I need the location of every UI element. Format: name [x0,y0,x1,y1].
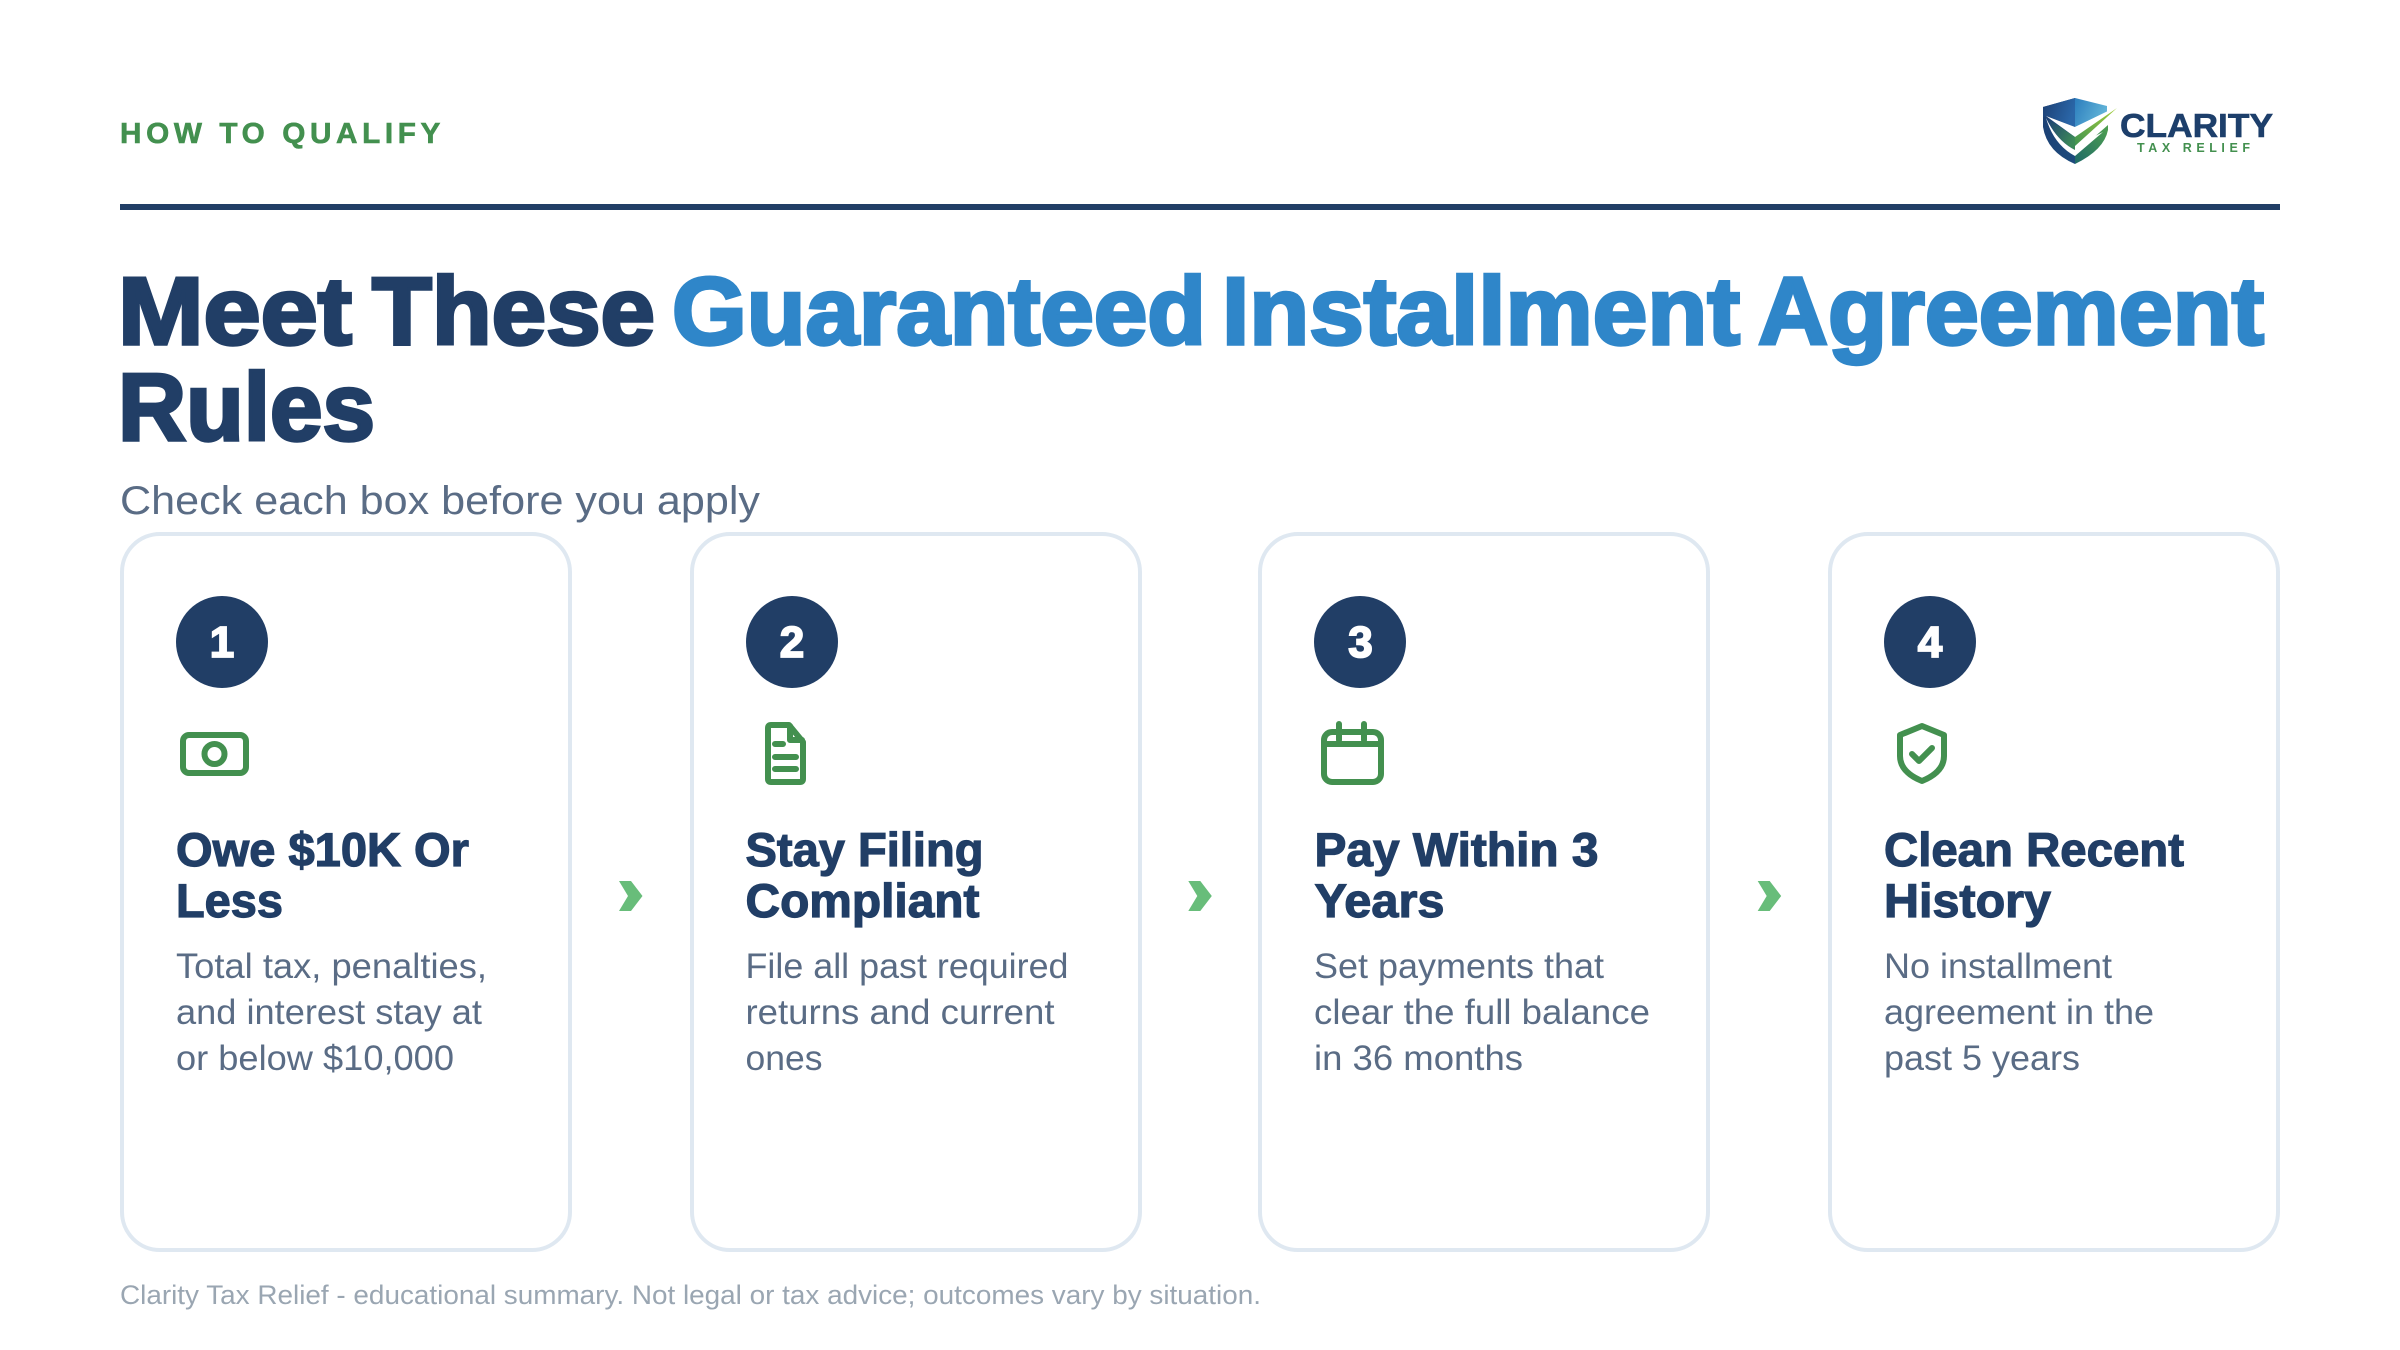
number badge 4 [1884,596,1976,688]
arrow 2 [1188,881,1212,911]
heading: owe $10K or less [176,823,469,927]
panel: step 1 [122,534,570,1250]
number badge 1 [176,596,268,688]
body text 4: agreement in the [1884,993,2154,1032]
body text 2: ones [746,1039,822,1078]
panel: step 2 [692,534,1140,1250]
body text 4: No installment [1884,947,2112,986]
heading: clean recent history [1884,823,2184,927]
body text 3 [1314,947,1650,1078]
footer disclaimer: Clarity Tax Relief - educational summary. Not legal or tax advice; outcomes vary by situation. [120,1280,1261,1310]
card 2 outline [692,534,1140,1250]
heading: pay within 3 years: Years [1314,874,1444,927]
number badge 1: 1 [210,618,234,667]
panel: step 3 [1260,534,1708,1250]
heading: clean recent history: Clean Recent [1884,823,2184,876]
icon: document [768,725,803,782]
title word: Meet: Meet [118,258,352,365]
body text 3: clear the full balance [1314,993,1650,1032]
header rule [120,204,2280,210]
arrow 3 [1758,881,1781,911]
card 3 outline [1260,534,1708,1250]
icon: shield check [1900,726,1944,781]
title word: Guaranteed: Guaranteed [672,258,1206,365]
number badge 3 [1314,596,1406,688]
heading: clean recent history: History [1884,874,2051,927]
body text 2 [746,947,1068,1078]
heading: stay filing compliant: Compliant [746,874,980,927]
number badge 2 [746,596,838,688]
card 4 outline [1830,534,2278,1250]
number badge 4: 4 [1918,618,1943,667]
logo shield icon [2043,98,2117,164]
title line 2: Rules [118,354,375,461]
body text 1 [176,947,487,1078]
body text 1: Total tax, penalties, [176,947,487,986]
body text 2: returns and current [746,993,1055,1032]
body text 4: past 5 years [1884,1039,2080,1078]
body text 4 [1884,947,2154,1078]
heading: owe $10K or less: Owe $10K Or [176,823,469,876]
body text 1: and interest stay at [176,993,482,1032]
body text 1: or below $10,000 [176,1039,454,1078]
body text 2: File all past required [746,947,1068,986]
heading: stay filing compliant [746,823,984,927]
title [118,258,2264,461]
number badge 3: 3 [1348,618,1373,667]
arrow 1 [619,881,642,911]
title word: Installment: Installment [1222,258,1740,365]
body text 3: in 36 months [1314,1039,1523,1078]
heading: pay within 3 years: Pay Within 3 [1314,823,1598,876]
icon: calendar [1324,724,1381,782]
icon: banknote [183,735,246,773]
eyebrow: how to qualify: HOW TO QUALIFY [120,118,445,150]
logo wordmark: CLARITY [2120,107,2273,144]
number badge 2: 2 [780,618,804,667]
logo: Clarity Tax Relief [2043,98,2273,164]
title word: These: These [372,258,655,365]
card 1 outline [122,534,570,1250]
panel: step 4 [1830,534,2278,1250]
body text 3: Set payments that [1314,947,1604,986]
logo tagline: TAX RELIEF [2137,141,2250,155]
heading: owe $10K or less: Less [176,874,283,927]
title word: Agreement: Agreement [1758,258,2264,365]
subtitle: Check each box before you apply [120,479,760,523]
heading: pay within 3 years [1314,823,1598,927]
heading: stay filing compliant: Stay Filing [746,823,984,876]
